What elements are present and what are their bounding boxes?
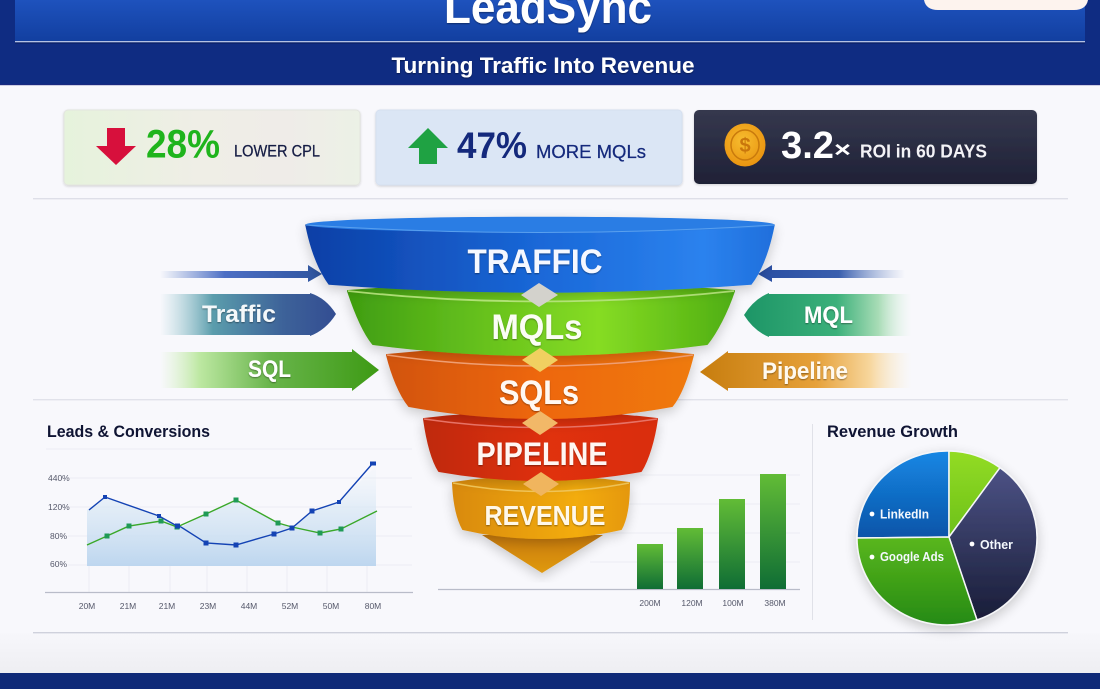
bars — [637, 474, 786, 589]
x axis labels — [79, 601, 381, 611]
icon: gold coin: $ — [739, 135, 751, 157]
panel: bar chart — [438, 474, 800, 608]
icon: gold coin — [724, 124, 766, 166]
x axis labels: 21M — [159, 601, 175, 611]
arrow: top right — [758, 265, 905, 282]
funnel label: TRAFFIC: TRAFFIC — [468, 243, 602, 281]
area fill — [87, 466, 376, 566]
funnel stage: pipeline — [424, 412, 657, 480]
arrow: SQL — [160, 349, 379, 391]
chart title: Revenue Growth — [827, 423, 958, 441]
bar labels — [639, 598, 786, 608]
funnel stage: revenue — [453, 476, 629, 538]
panel: revenue growth pie chart — [827, 423, 1037, 625]
arrow: MQL: MQL — [804, 302, 853, 329]
arrow: top left — [160, 265, 322, 282]
x axis labels: 80M — [365, 601, 381, 611]
blue series — [89, 462, 376, 548]
x axis labels: 23M — [200, 601, 216, 611]
chart title: Leads & Conversions — [47, 423, 210, 441]
funnel stage: traffic — [306, 217, 774, 292]
stat label: ROI in 60 DAYS — [860, 140, 987, 162]
bar labels: 100M — [722, 598, 744, 608]
funnel — [306, 217, 774, 573]
subtitle: Turning Traffic Into Revenue — [392, 53, 694, 78]
panel: leads and conversions line chart — [45, 423, 413, 611]
x axis labels: 52M — [282, 601, 298, 611]
axis — [438, 588, 800, 590]
stat value: 47% — [457, 125, 527, 166]
arrow: SQL: SQL — [248, 356, 291, 383]
stat card: lower CPL — [64, 110, 360, 185]
stat label: LOWER CPL — [234, 142, 320, 160]
multiplier sign: × — [834, 137, 851, 162]
connector diamonds — [521, 283, 559, 496]
pie label: Google Ads: Google Ads — [880, 549, 944, 564]
stat label: MORE MQLs — [536, 142, 646, 162]
x axis labels: 44M — [241, 601, 257, 611]
stat value: 28% — [146, 122, 220, 166]
arrow: Traffic — [160, 293, 336, 336]
y axis labels: 60% — [50, 559, 67, 569]
arrow: MQL — [744, 293, 912, 337]
bar labels: 120M — [681, 598, 703, 608]
x axis labels: 21M — [120, 601, 136, 611]
funnel label: SQLs: SQLs — [499, 374, 579, 412]
pie — [857, 451, 1037, 625]
y axis labels: 440% — [48, 473, 70, 483]
x axis labels: 50M — [323, 601, 339, 611]
funnel tip — [482, 535, 603, 573]
arrow: Traffic: Traffic — [202, 301, 276, 328]
funnel label: MQLs: MQLs — [492, 308, 582, 347]
y axis labels: 120% — [48, 502, 70, 512]
header banner — [0, 0, 1100, 85]
funnel stage: MQLs — [348, 284, 734, 355]
icon: down arrow — [96, 128, 136, 165]
pie label: LinkedIn: LinkedIn — [880, 506, 929, 522]
bar labels: 380M — [764, 598, 786, 608]
bar labels: 200M — [639, 598, 661, 608]
arrow: Pipeline — [700, 351, 912, 391]
stat card: more MQLs — [376, 110, 682, 185]
funnel stage: SQLs — [387, 348, 693, 418]
stat value: 3.2 — [781, 125, 834, 167]
icon: up arrow — [408, 128, 448, 164]
green series — [87, 498, 377, 545]
pie label: Other: Other — [980, 537, 1013, 552]
funnel label: PIPELINE: PIPELINE — [476, 436, 608, 472]
footer bar — [0, 673, 1100, 689]
axis — [45, 592, 413, 594]
stat card: ROI — [694, 110, 1037, 184]
logo pill — [924, 0, 1088, 10]
funnel label: REVENUE: REVENUE — [484, 500, 606, 531]
y axis labels: 80% — [50, 531, 67, 541]
arrow: Pipeline: Pipeline — [762, 358, 848, 385]
x axis labels: 20M — [79, 601, 95, 611]
y axis labels — [48, 473, 70, 569]
